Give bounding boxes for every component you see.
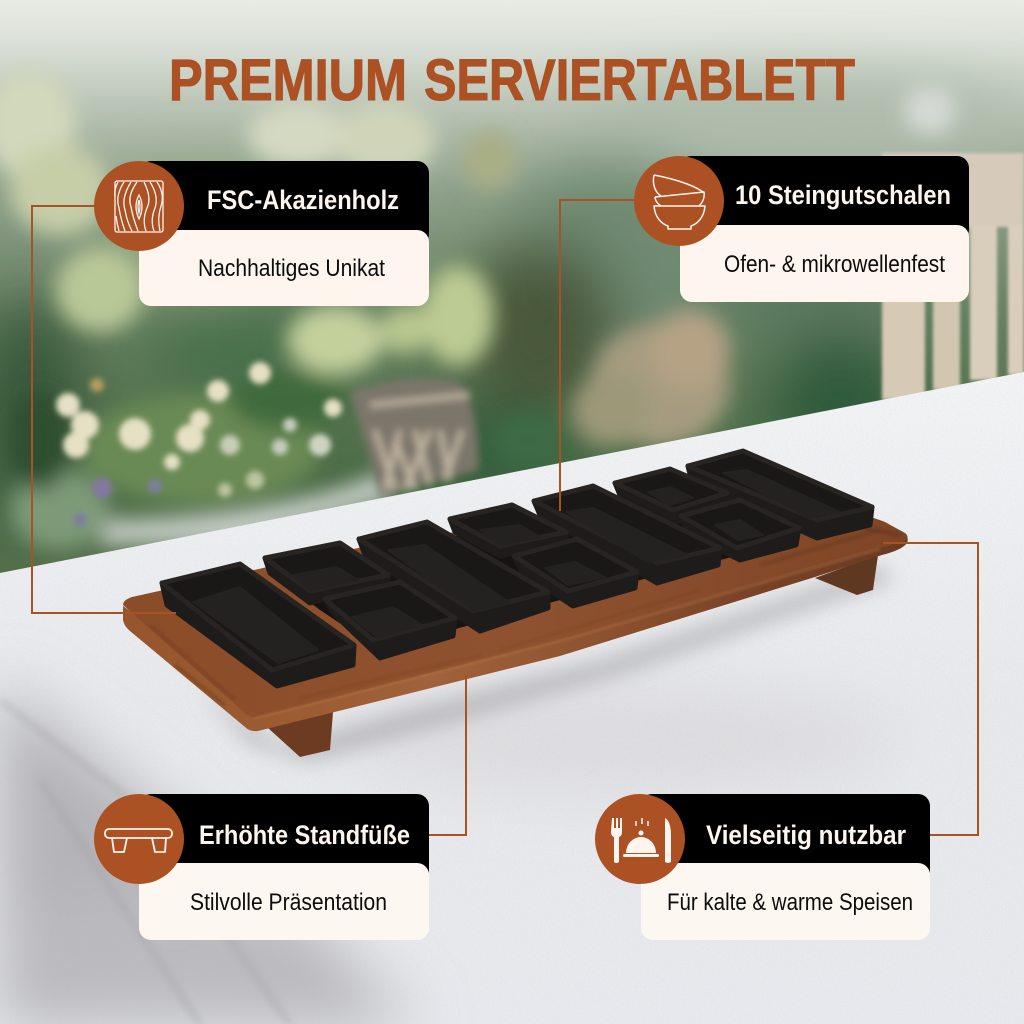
badge circle (595, 794, 685, 884)
header bar (139, 794, 429, 882)
title: PREMIUM (169, 48, 407, 113)
icon: stacked bowls (653, 175, 705, 229)
tray board top (123, 516, 908, 717)
badge circle (634, 156, 724, 246)
table cloth (0, 372, 1024, 1024)
dark gaps between bowls (280, 485, 790, 650)
tray board front edge (123, 532, 908, 731)
icon: wood grain (115, 181, 163, 232)
header bar (679, 156, 969, 241)
badge circle (94, 794, 184, 884)
header bar (640, 794, 930, 882)
card: Erhöhte Standfüße (94, 794, 429, 940)
bowl 7 (534, 486, 720, 583)
heading: 10 Steingutschalen (735, 180, 951, 210)
title: SERVIERTABLETT (424, 48, 855, 113)
connector lines (32, 200, 978, 835)
bowl 1 (162, 564, 354, 686)
bowl 9 (681, 500, 799, 560)
garden chair (882, 153, 1024, 400)
description panel (139, 230, 429, 306)
description: Nachhaltiges Unikat (198, 255, 385, 282)
badge circle (94, 161, 184, 251)
bowl 10 (688, 451, 872, 538)
description panel (139, 863, 429, 940)
card: Vielseitig nutzbar (595, 794, 930, 940)
icon: tray with raised feet (105, 829, 172, 852)
card: FSC-Akazienholz (94, 161, 429, 306)
description panel (680, 225, 969, 302)
description: Ofen- & mikrowellenfest (724, 251, 945, 278)
bowl 3 (325, 582, 455, 658)
card: 10 Steingutschalen (634, 156, 969, 302)
description panel (641, 863, 930, 940)
tray foot left (268, 712, 333, 757)
description: Stilvolle Präsentation (190, 889, 387, 916)
bowl 6 (514, 539, 637, 606)
heading: FSC-Akazienholz (207, 185, 399, 215)
bowl 4 (359, 522, 548, 631)
tray shadow (200, 565, 895, 762)
heading: Vielseitig nutzbar (706, 820, 906, 850)
product: wooden serving tray (123, 451, 908, 757)
description: Für kalte & warme Speisen (667, 889, 913, 916)
bowl 2 (265, 543, 388, 603)
title (169, 48, 855, 113)
background: blurred garden photo (0, 0, 1024, 640)
header bar (139, 161, 429, 246)
heading: Erhöhte Standfüße (199, 820, 410, 850)
bowl 5 (450, 505, 566, 556)
bowl 8 (615, 469, 727, 523)
tray foot right (815, 555, 878, 595)
icon: fork, cloche and knife (611, 818, 671, 863)
